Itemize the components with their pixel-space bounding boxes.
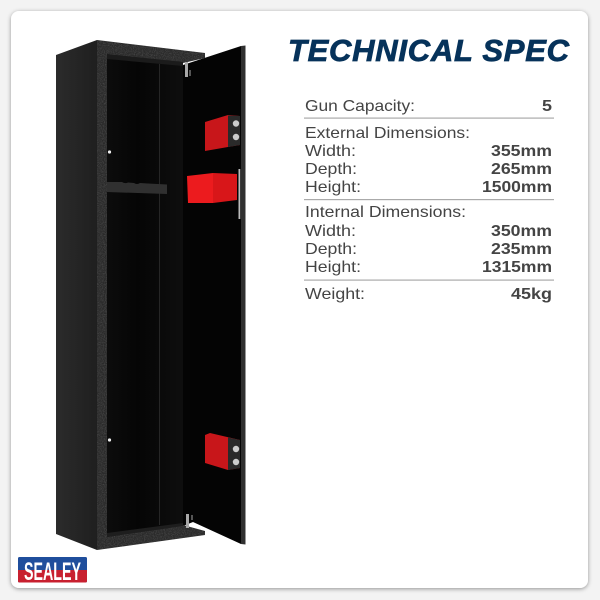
- row: gun capacity: [305, 98, 552, 115]
- door lock bottom: [205, 433, 240, 470]
- safe interior: [107, 54, 183, 537]
- row: internal depth: Depth:: [305, 241, 357, 258]
- gun safe illustration: [56, 40, 246, 550]
- row: external height: Height:: [305, 179, 361, 196]
- row: internal width: Width:: [305, 223, 356, 240]
- hinges: [185, 62, 193, 528]
- Sealey logo: [18, 557, 87, 586]
- row: external depth: [305, 161, 552, 178]
- external dimensions heading: External Dimensions:: [305, 125, 470, 142]
- row: internal width: [305, 223, 552, 240]
- row: internal height: 1315mm: [482, 259, 552, 276]
- safe side panel: [56, 40, 97, 550]
- row: internal height: [305, 259, 552, 276]
- row: weight: [305, 286, 552, 303]
- gun rack: [107, 182, 167, 194]
- open door: [183, 46, 246, 544]
- spec table: [304, 98, 554, 303]
- row: external width: [305, 143, 552, 160]
- row: gun capacity: 5: [542, 98, 552, 115]
- row: internal depth: 235mm: [491, 241, 552, 258]
- row: gun capacity: Gun Capacity:: [305, 98, 415, 115]
- row: external depth: Depth:: [305, 161, 357, 178]
- row: internal height: Height:: [305, 259, 361, 276]
- internal dimensions heading: Internal Dimensions:: [305, 204, 466, 221]
- row: internal depth: [305, 241, 552, 258]
- row: external width: 355mm: [491, 143, 552, 160]
- door handle: [238, 169, 240, 219]
- door lock top: [205, 115, 240, 151]
- row: external height: 1500mm: [482, 179, 552, 196]
- row: weight: 45kg: [511, 286, 552, 303]
- safe front frame: [97, 40, 205, 550]
- title: TECHNICAL SPEC: [288, 33, 570, 68]
- row: internal width: 350mm: [491, 223, 552, 240]
- row: external width: Width:: [305, 143, 356, 160]
- Sealey logo: SEALEY: [24, 558, 81, 586]
- row: weight: Weight:: [305, 286, 365, 303]
- row: external depth: 265mm: [491, 161, 552, 178]
- red box: [187, 173, 237, 203]
- row: external height: [305, 179, 552, 196]
